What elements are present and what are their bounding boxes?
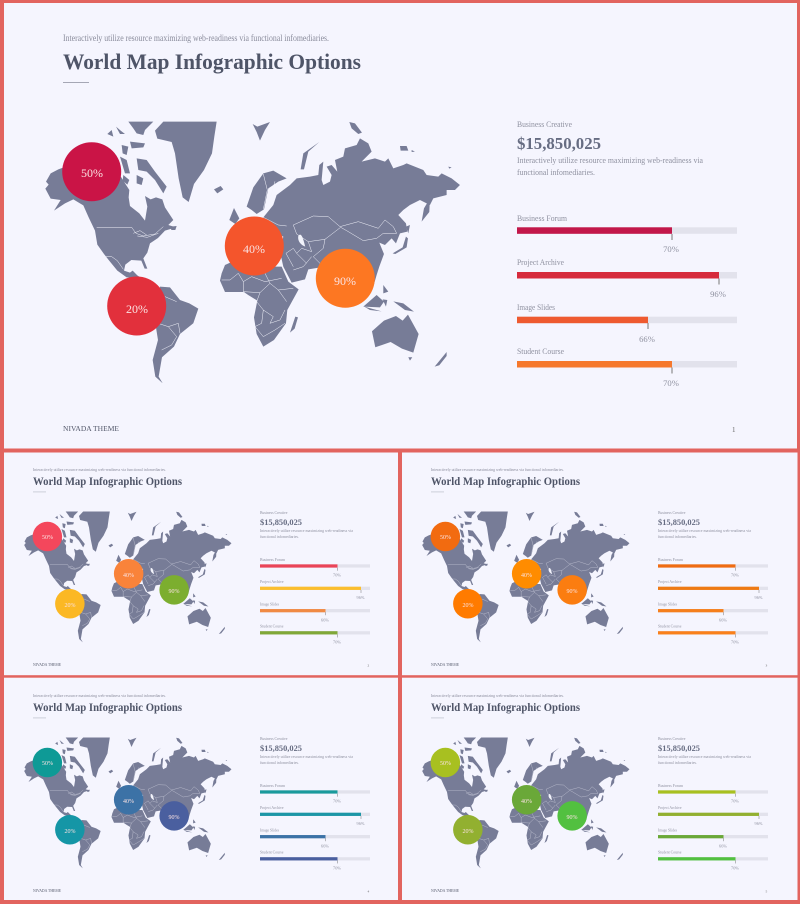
bar: Image Slides: Image Slides (260, 602, 279, 607)
header text (33, 467, 183, 492)
footer: NIVADA THEME (63, 424, 119, 433)
header text: World Map Infographic Options (33, 476, 183, 488)
world map (422, 512, 629, 642)
header text: World Map Infographic Options (431, 476, 581, 488)
bar: Image Slides: Image Slides (658, 828, 677, 833)
percentage bubble 20% (453, 815, 483, 844)
bar: Image Slides: 66% (639, 334, 655, 344)
percentage bubble 20% (55, 815, 85, 844)
revenue block: Interactively utilize resource maximizing web-readiness via (260, 528, 353, 533)
revenue block: functional infomediaries. (517, 167, 595, 177)
bar: Student Course (658, 624, 768, 645)
percentage bubble 50% (431, 748, 460, 777)
bar: Image Slides: Image Slides (658, 602, 677, 607)
percentage bubble 50%: 50% (440, 535, 451, 541)
bar: Image Slides: Image Slides (517, 302, 556, 312)
bar: Image Slides: 66% (719, 844, 727, 849)
bar: Business Forum: Business Forum (658, 557, 684, 562)
footer: NIVADA THEME (33, 889, 62, 893)
revenue block: functional infomediaries. (260, 534, 299, 539)
bar: Business Forum (517, 213, 737, 254)
revenue block (658, 736, 751, 765)
footer (33, 889, 370, 894)
bar: Business Forum: 70% (731, 573, 739, 578)
revenue block: Interactively utilize resource maximizing web-readiness via (658, 528, 751, 533)
revenue block: Interactively utilize resource maximizing web-readiness via (517, 155, 703, 165)
bar: Student Course (260, 850, 370, 871)
bar: Business Forum (260, 783, 370, 804)
revenue block: $15,850,025 (658, 743, 700, 753)
percentage bubble 90%: 90% (168, 589, 180, 595)
percentage bubble 90%: 90% (168, 815, 180, 821)
revenue block: Business Creative (260, 736, 288, 741)
percentage bubble 20% (107, 276, 166, 336)
bar: Student Course: 70% (663, 378, 679, 388)
world map (422, 738, 629, 868)
percentage bubble 40% (512, 785, 541, 814)
bar: Business Forum (658, 557, 768, 578)
header text: World Map Infographic Options (63, 49, 361, 74)
slide 3: orange version (402, 452, 798, 675)
percentage bubble 50%: 50% (440, 761, 451, 767)
bar: Student Course: Student Course (260, 850, 284, 855)
bar: Project Archive: 96% (357, 821, 365, 826)
revenue block: $15,850,025 (517, 134, 601, 153)
header text: Interactively utilize resource maximizing web-readiness via functional infomediaries. (431, 693, 564, 698)
slide 4: teal/blue version (4, 678, 398, 900)
revenue block: $15,850,025 (260, 743, 302, 753)
percentage bubble 50%: 50% (42, 535, 53, 541)
bar: Image Slides: 66% (719, 618, 727, 623)
bar: Business Forum: 70% (731, 799, 739, 804)
slide 1: large red/orange version (4, 3, 797, 448)
bar: Project Archive (517, 257, 737, 299)
header text (431, 693, 581, 718)
percentage bubble 40% (225, 216, 284, 276)
bar: Business Forum (658, 783, 768, 804)
bar: Student Course: Student Course (260, 624, 284, 629)
percentage bubble 90% (557, 801, 587, 831)
header text: World Map Infographic Options (33, 702, 183, 714)
bar: Business Forum: 70% (333, 573, 341, 578)
bar: Business Forum: Business Forum (517, 213, 567, 223)
percentage bubble 40% (114, 785, 143, 814)
percentage bubble 40% (512, 559, 541, 588)
bar: Business Forum: Business Forum (260, 783, 286, 788)
bar: Image Slides (658, 602, 768, 623)
footer (33, 663, 370, 668)
bar: Project Archive: Project Archive (260, 805, 284, 810)
bar: Business Forum: 70% (663, 244, 679, 254)
bar: Student Course: 70% (333, 640, 341, 645)
revenue block: Business Creative (517, 119, 572, 129)
header text: Interactively utilize resource maximizing web-readiness via functional infomediaries. (33, 693, 166, 698)
percentage bubble 90%: 90% (566, 815, 578, 821)
percentage bubble 20%: 20% (64, 829, 76, 835)
percentage bubble 40%: 40% (521, 573, 532, 579)
header text: Interactively utilize resource maximizing web-readiness via functional infomediaries. (63, 33, 329, 43)
percentage bubble 40%: 40% (243, 242, 265, 256)
bar: Project Archive (260, 805, 370, 826)
revenue block: Business Creative (658, 736, 686, 741)
bar: Image Slides: 66% (321, 844, 329, 849)
header text: Interactively utilize resource maximizing web-readiness via functional infomediaries. (33, 467, 166, 472)
revenue block: Business Creative (658, 510, 686, 515)
slide 2: multicolour version (4, 452, 398, 675)
percentage bubble 40%: 40% (123, 573, 134, 579)
revenue block: functional infomediaries. (658, 534, 697, 539)
footer (431, 663, 768, 668)
revenue block: functional infomediaries. (658, 760, 697, 765)
footer (63, 424, 736, 434)
percentage bubble 90% (316, 249, 375, 308)
bar: Student Course: Student Course (658, 624, 682, 629)
percentage bubble 90%: 90% (566, 589, 578, 595)
percentage bubble 90% (159, 575, 189, 605)
bar: Image Slides (658, 828, 768, 849)
header text (33, 693, 183, 718)
bar: Student Course (517, 346, 737, 388)
bar: Business Forum: Business Forum (658, 783, 684, 788)
percentage bubble 20%: 20% (126, 302, 148, 316)
bar: Project Archive: Project Archive (260, 579, 284, 584)
bar: Student Course: 70% (731, 866, 739, 871)
percentage bubble 50% (33, 522, 62, 551)
revenue block: $15,850,025 (658, 517, 700, 527)
percentage bubble 50%: 50% (81, 166, 103, 180)
percentage bubble 20% (453, 589, 483, 618)
percentage bubble 90%: 90% (334, 274, 356, 288)
bar: Business Forum: 70% (333, 799, 341, 804)
percentage bubble 50%: 50% (42, 761, 53, 767)
percentage bubble 40% (114, 559, 143, 588)
slide 5: green version (402, 678, 798, 900)
footer: NIVADA THEME (33, 663, 62, 667)
footer: NIVADA THEME (431, 663, 460, 667)
footer: 4 (368, 890, 370, 894)
percentage bubble 50% (62, 142, 121, 201)
bar: Business Forum (260, 557, 370, 578)
bar: Project Archive: Project Archive (658, 579, 682, 584)
world map (24, 512, 231, 642)
footer: NIVADA THEME (431, 889, 460, 893)
revenue block (517, 119, 703, 177)
bar: Image Slides (260, 828, 370, 849)
bar: Image Slides: Image Slides (260, 828, 279, 833)
bar: Image Slides (517, 302, 737, 344)
footer: 3 (766, 664, 768, 668)
revenue block (260, 736, 353, 765)
bar: Business Forum: Business Forum (260, 557, 286, 562)
bar: Student Course (658, 850, 768, 871)
footer: 1 (732, 426, 736, 434)
percentage bubble 50% (431, 522, 460, 551)
world map (45, 122, 460, 383)
revenue block: $15,850,025 (260, 517, 302, 527)
bar: Project Archive: Project Archive (658, 805, 682, 810)
revenue block: Interactively utilize resource maximizing web-readiness via (260, 754, 353, 759)
bar: Student Course (260, 624, 370, 645)
bar: Project Archive: 96% (755, 821, 763, 826)
header text: Interactively utilize resource maximizing web-readiness via functional infomediaries. (431, 467, 564, 472)
bar: Project Archive (658, 805, 768, 826)
bar: Project Archive (658, 579, 768, 600)
world map (24, 738, 231, 868)
bar: Student Course: 70% (731, 640, 739, 645)
header text (431, 467, 581, 492)
bar: Project Archive: 96% (710, 289, 726, 299)
footer: 5 (766, 890, 768, 894)
percentage bubble 90% (557, 575, 587, 605)
bar: Project Archive: 96% (357, 595, 365, 600)
percentage bubble 40%: 40% (521, 799, 532, 805)
percentage bubble 20%: 20% (462, 603, 474, 609)
revenue block: Interactively utilize resource maximizing web-readiness via (658, 754, 751, 759)
header text: World Map Infographic Options (431, 702, 581, 714)
revenue block (260, 510, 353, 539)
percentage bubble 20%: 20% (64, 603, 76, 609)
footer: 2 (368, 664, 370, 668)
bar: Student Course: 70% (333, 866, 341, 871)
percentage bubble 90% (159, 801, 189, 831)
bar: Project Archive (260, 579, 370, 600)
bar: Image Slides: 66% (321, 618, 329, 623)
revenue block (658, 510, 751, 539)
bar: Student Course: Student Course (517, 346, 564, 356)
percentage bubble 40%: 40% (123, 799, 134, 805)
header text (63, 33, 361, 83)
bar: Project Archive: Project Archive (517, 257, 564, 267)
bar: Image Slides (260, 602, 370, 623)
percentage bubble 20% (55, 589, 85, 618)
revenue block: Business Creative (260, 510, 288, 515)
bar: Project Archive: 96% (755, 595, 763, 600)
percentage bubble 50% (33, 748, 62, 777)
footer (431, 889, 768, 894)
percentage bubble 20%: 20% (462, 829, 474, 835)
revenue block: functional infomediaries. (260, 760, 299, 765)
bar: Student Course: Student Course (658, 850, 682, 855)
